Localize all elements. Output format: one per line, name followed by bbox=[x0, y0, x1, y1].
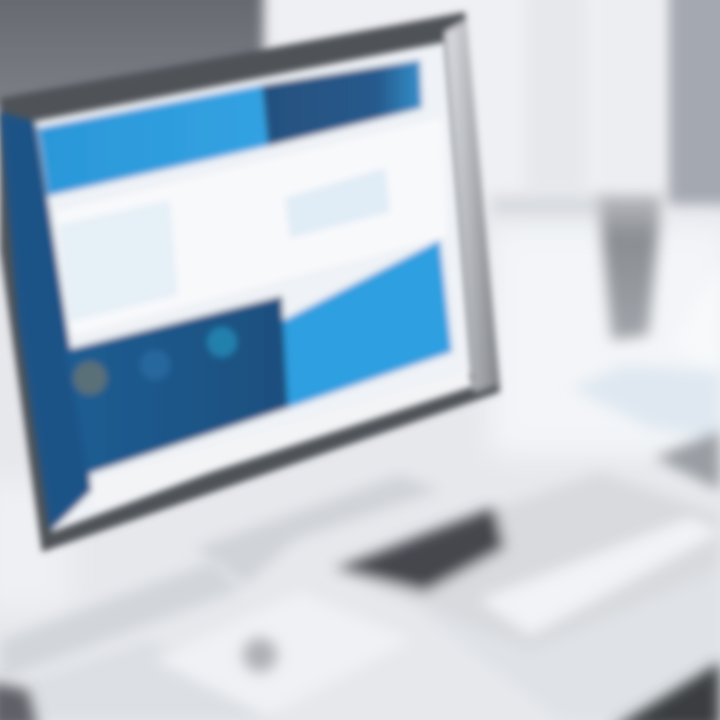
keyboard or tablet on the desk bbox=[328, 472, 720, 650]
lower left navy panel bbox=[66, 296, 288, 474]
left navy edge bbox=[0, 112, 92, 532]
top light blue banner bbox=[38, 85, 268, 196]
pale cards in white panel bbox=[58, 200, 178, 322]
lower right blue panel bbox=[280, 240, 452, 408]
object: glass base on the right bbox=[572, 262, 720, 490]
monitor stand bbox=[195, 475, 440, 585]
navy panel icons bbox=[73, 361, 107, 395]
shelf objects in the background bbox=[490, 0, 660, 217]
screen base bbox=[30, 42, 472, 532]
middle white content panel bbox=[55, 118, 447, 336]
screen bbox=[0, 42, 474, 532]
monitor frame bbox=[0, 12, 500, 552]
top dark blue banner bbox=[262, 60, 422, 146]
dark corners of the desk bbox=[0, 662, 720, 720]
desk shading bands bbox=[0, 560, 720, 720]
object: grey cylinder on the right bbox=[598, 195, 662, 340]
bottom white strip bbox=[90, 372, 474, 510]
mouse pad and mouse bbox=[155, 592, 412, 716]
